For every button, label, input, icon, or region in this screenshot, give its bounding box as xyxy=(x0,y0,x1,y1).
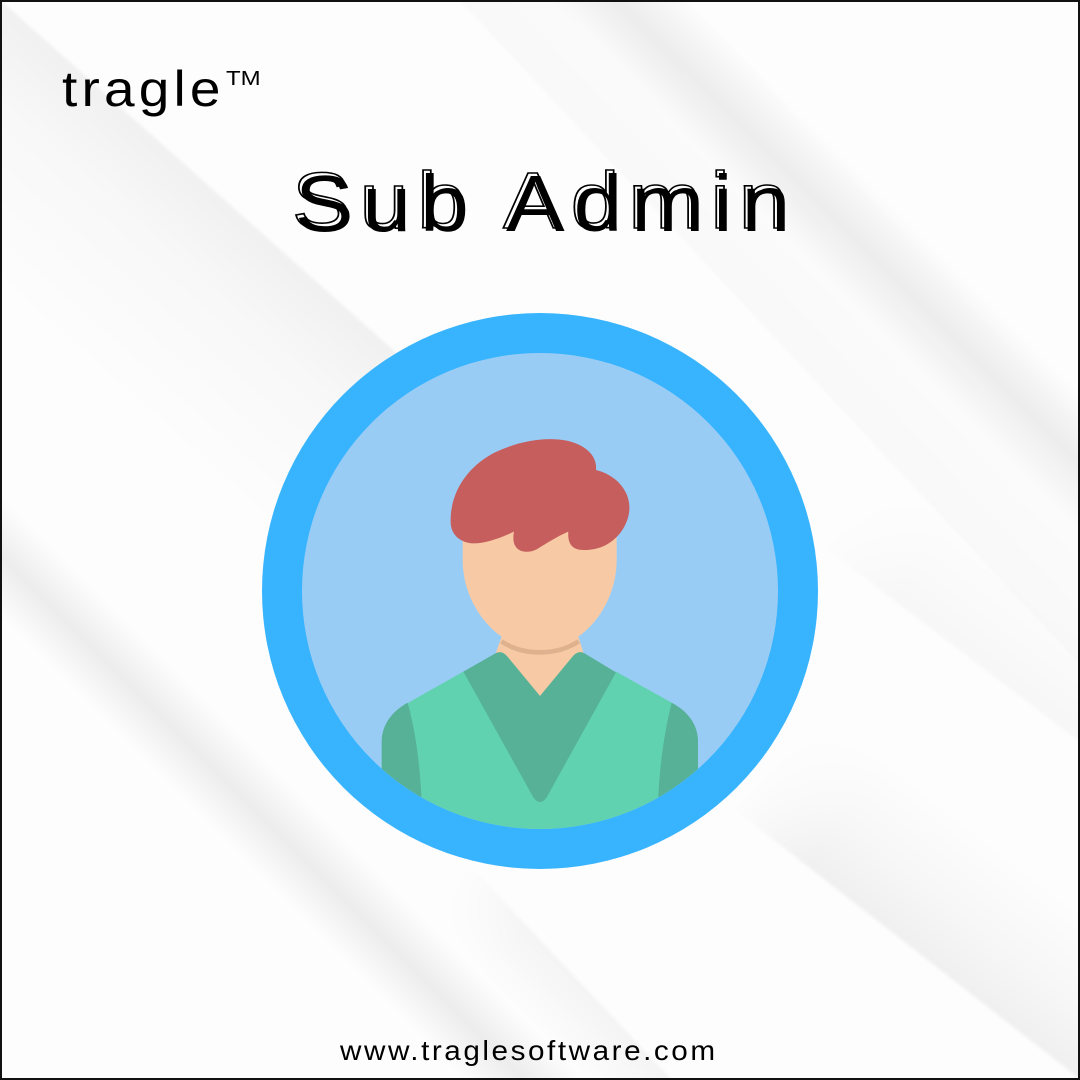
vest xyxy=(402,672,678,830)
logo wordmark: TM xyxy=(226,68,261,90)
inner light blue disc xyxy=(302,353,778,829)
person figure xyxy=(382,439,698,830)
icon: sub admin avatar xyxy=(262,313,818,869)
right sleeve xyxy=(658,702,698,798)
neck xyxy=(496,637,583,700)
left sleeve xyxy=(382,702,422,798)
neck shadow xyxy=(501,641,579,652)
collar xyxy=(463,652,616,802)
logo wordmark: tragle xyxy=(62,61,225,117)
outer blue ring xyxy=(262,313,818,869)
website url: www.traglesoftware.com xyxy=(340,1035,718,1066)
face xyxy=(462,532,617,637)
hair xyxy=(451,439,629,552)
title: Sub Admin xyxy=(292,156,796,245)
